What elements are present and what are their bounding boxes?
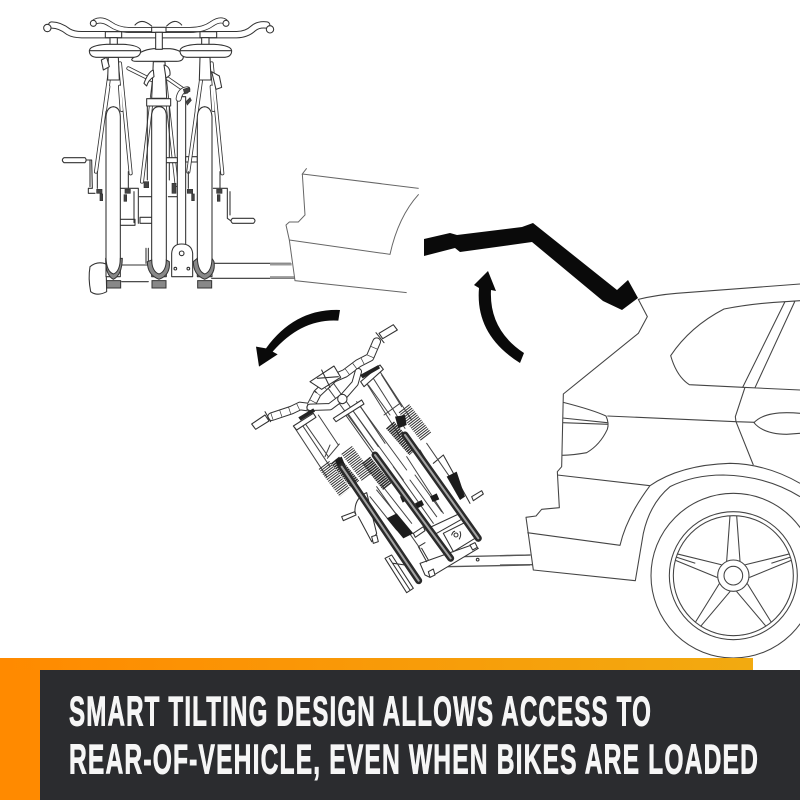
tail light xyxy=(562,402,608,455)
hitch arm xyxy=(447,555,530,567)
arrow: curved left for rack tilt xyxy=(256,310,340,367)
top wheel caps xyxy=(89,44,232,57)
handlebar crossbars xyxy=(293,365,383,430)
black tailgate silhouette xyxy=(424,223,638,310)
hitch tube xyxy=(122,263,294,282)
hitch stub xyxy=(270,264,294,277)
tilted handlebars xyxy=(252,325,397,429)
rack base plate xyxy=(420,545,478,577)
handlebars xyxy=(44,20,274,49)
caption text xyxy=(69,688,759,782)
hitch arm hole xyxy=(476,558,479,561)
orange accent band xyxy=(0,658,753,800)
light coils xyxy=(324,408,426,493)
bumper and fender lines xyxy=(527,463,800,545)
rack plate details xyxy=(413,513,477,577)
rear side window xyxy=(671,302,785,387)
fork boxes xyxy=(305,375,402,458)
door handle xyxy=(754,413,800,434)
crank stubs xyxy=(342,455,483,543)
bumper outline xyxy=(286,168,419,293)
bike wheels xyxy=(106,107,212,277)
illustration: tilted bike rack xyxy=(252,325,530,593)
hitch tube at car xyxy=(500,555,533,565)
dark caption panel xyxy=(40,670,800,800)
left wheel rail xyxy=(342,467,419,581)
wheel cradles xyxy=(106,258,214,288)
door pillar and door lines xyxy=(607,301,800,465)
dark derailleur clusters xyxy=(335,415,465,538)
long frame tubes xyxy=(294,372,463,548)
hitch bracket xyxy=(172,244,193,277)
middle bike frame xyxy=(128,49,187,197)
rack crank handles xyxy=(62,157,255,263)
left bike frame xyxy=(96,57,131,201)
middle wheel rail xyxy=(375,455,451,558)
rack upright bar and hook xyxy=(177,87,191,245)
folding support arm xyxy=(385,555,413,593)
wheel xyxy=(651,493,800,658)
dark coils xyxy=(335,425,413,487)
car body outline xyxy=(526,284,800,581)
right bike frame xyxy=(187,57,222,201)
arrow: curved up toward tailgate xyxy=(474,271,524,363)
right wheel rail xyxy=(405,435,478,538)
illustration: rear view of bike rack with three bikes xyxy=(44,20,294,294)
illustration: lowered bumper fragment xyxy=(270,168,419,293)
hitch end cap xyxy=(89,263,107,294)
caption banner xyxy=(0,658,800,800)
solid orange left strip xyxy=(0,670,40,800)
illustration: rear of SUV xyxy=(500,284,800,658)
